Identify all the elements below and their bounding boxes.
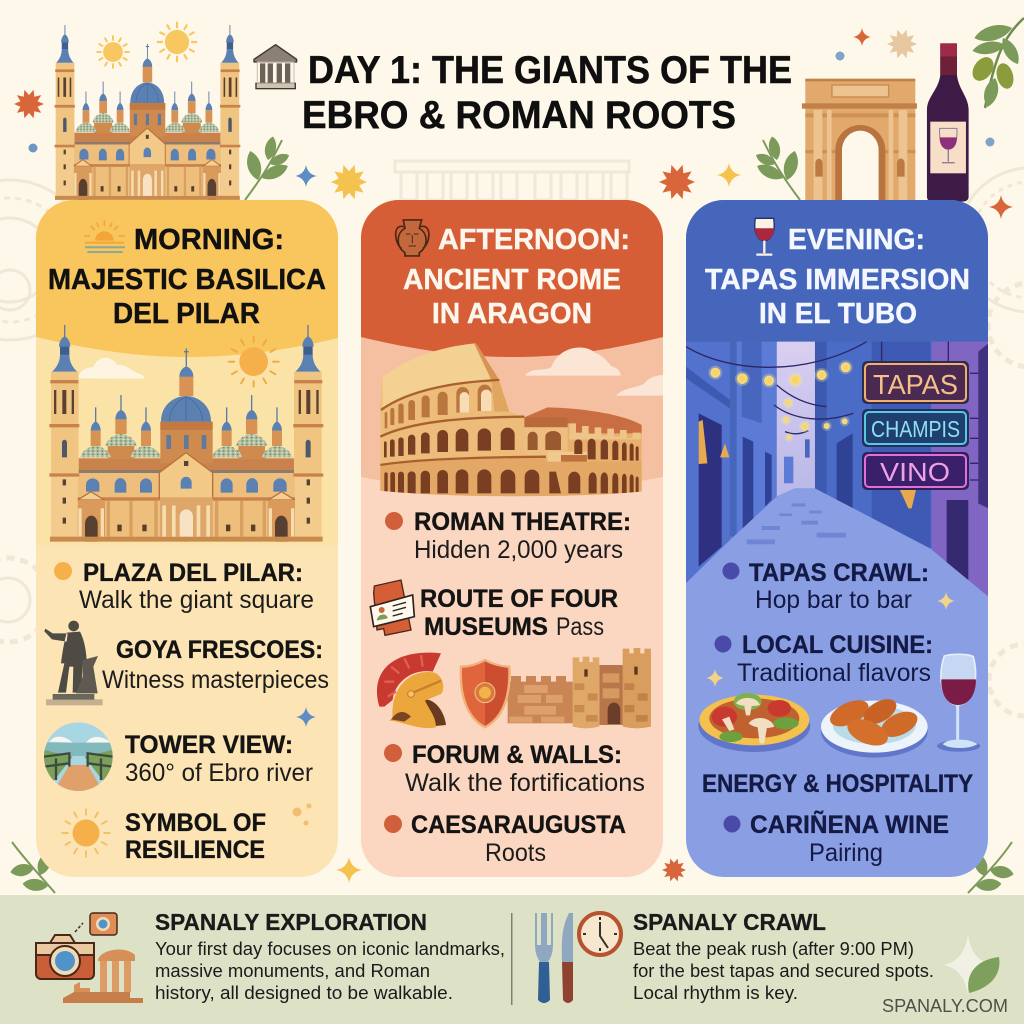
sparkle (706, 669, 724, 687)
item: route of four museums (420, 585, 618, 641)
item: local cuisine: Traditional flavors (737, 659, 931, 687)
item: plaza del pilar (54, 559, 314, 614)
item: caesaraugusta (384, 811, 626, 867)
heading: afternoon: AFTERNOON: (438, 224, 630, 256)
heading: afternoon: ANCIENT ROME (403, 264, 621, 296)
neon sign: champis: CHAMPIS (871, 416, 960, 442)
item: plaza del pilar: Walk the giant square (79, 586, 314, 614)
neon sign: vino (862, 452, 969, 490)
item: energy and hospitality: ENERGY & HOSPITALITY (702, 770, 973, 798)
scene: alley (686, 342, 988, 607)
text block: for the best tapas and secured spots. (633, 960, 934, 981)
icon: wine glass large (937, 654, 980, 752)
olive branch top right (968, 18, 1024, 109)
scene: colosseum (380, 343, 663, 497)
neon sign: tapas: TAPAS (873, 369, 958, 400)
heading: morning: MORNING: (134, 224, 284, 256)
illustration: basilica top (55, 25, 240, 200)
item: symbol of resilience (125, 809, 266, 864)
heading: evening: IN EL TUBO (759, 298, 917, 330)
heading: SPANALY CRAWL (633, 909, 826, 935)
item: tower view (125, 731, 313, 787)
footer band (0, 895, 1024, 1024)
item: local cuisine: LOCAL CUISINE: (742, 631, 933, 659)
item: caesaraugusta: CAESARAUGUSTA (411, 811, 626, 839)
item: symbol of resilience: SYMBOL OF (125, 809, 266, 837)
sprigs of olive leaves (9, 135, 1015, 893)
icon: amphora (396, 220, 429, 256)
item: tower view: TOWER VIEW: (125, 731, 293, 759)
text block (633, 938, 934, 1003)
item: goya frescoes (102, 636, 329, 694)
item: symbol of resilience: RESILIENCE (125, 836, 265, 864)
heading: morning: MAJESTIC BASILICA (48, 264, 326, 296)
divider (511, 913, 512, 1005)
item: goya frescoes: GOYA FRESCOES: (116, 636, 323, 664)
logo: spanaly: SPANALY.COM (882, 996, 1008, 1016)
dots (292, 804, 312, 826)
heading: morning (48, 224, 326, 330)
item: forum and walls: FORUM & WALLS: (412, 741, 622, 769)
icon: tower view (44, 722, 113, 793)
icon: sun (62, 809, 110, 857)
item: route of four museums: Pass (556, 613, 604, 641)
string lights (686, 342, 978, 480)
text block: Beat the peak rush (after 9:00 PM) (633, 938, 914, 959)
footer: crawl (535, 909, 934, 1003)
item: roman theatre: ROMAN THEATRE: (414, 508, 631, 536)
footer: exploration (36, 909, 505, 1003)
item: plaza del pilar: PLAZA DEL PILAR: (83, 559, 303, 587)
item: tapas crawl: TAPAS CRAWL: (749, 559, 929, 587)
heading: afternoon (403, 224, 630, 330)
neon sign: vino: VINO (880, 457, 950, 487)
panel: evening (686, 200, 988, 877)
item: tapas crawl (722, 559, 929, 614)
sparkle (937, 592, 955, 610)
heading: afternoon: IN ARAGON (432, 298, 592, 330)
item: tower view: 360° of Ebro river (125, 759, 313, 787)
faint medallion patterns (0, 168, 1024, 716)
text block: massive monuments, and Roman (155, 960, 430, 981)
title line 1: DAY 1: THE GIANTS OF THE (308, 49, 792, 92)
text block: history, all designed to be walkable. (155, 982, 453, 1003)
icon: goya statue (44, 621, 103, 705)
scene: basilica with sun (49, 325, 323, 542)
heading: SPANALY EXPLORATION (155, 909, 427, 935)
sparkle (296, 707, 316, 727)
item: route of four museums: MUSEUMS (424, 613, 548, 641)
neon sign: tapas (862, 361, 969, 404)
icon: fork and knife (535, 913, 573, 1003)
item: goya frescoes: Witness masterpieces (102, 666, 329, 694)
text block: Your first day focuses on iconic landmarks, (155, 938, 505, 959)
icon: ticket (370, 580, 414, 635)
neon sign: champis (862, 409, 969, 447)
icon: temple (254, 45, 297, 89)
title line 2: EBRO & ROMAN ROOTS (302, 94, 736, 137)
item: forum and walls: Walk the fortifications (405, 769, 645, 797)
title (254, 45, 792, 137)
heading: morning: DEL PILAR (113, 298, 260, 330)
item: caesaraugusta: Roots (485, 839, 546, 867)
item: roman theatre (385, 508, 631, 564)
item: carinena wine: CARIÑENA WINE (750, 809, 949, 839)
food: croquettes plate (821, 694, 928, 758)
icon: camera and ruins (36, 913, 143, 1003)
logo: spanaly (882, 935, 1008, 1016)
faint temple outline (395, 161, 629, 200)
item: local cuisine (714, 631, 933, 687)
heading: evening: TAPAS IMMERSION (705, 264, 970, 296)
panel: morning (36, 200, 338, 877)
item: carinena wine (724, 809, 949, 867)
icons: roman helmet, shield and walls (377, 648, 651, 728)
suns top (97, 23, 196, 68)
item: tapas crawl: Hop bar to bar (755, 586, 912, 614)
item: route of four museums: ROUTE OF FOUR (420, 585, 618, 613)
item: roman theatre: Hidden 2,000 years (414, 536, 623, 564)
text block (155, 938, 505, 1003)
text block: Local rhythm is key. (633, 982, 798, 1003)
heading: evening: EVENING: (788, 224, 925, 256)
panel: afternoon (361, 200, 663, 877)
triumphal arch (802, 79, 917, 200)
wine bottle (927, 43, 969, 202)
icon: clock (579, 913, 621, 955)
heading: evening (705, 224, 970, 330)
item: forum and walls (384, 741, 645, 797)
icon: sunrise (84, 220, 125, 252)
item: carinena wine: Pairing (809, 839, 883, 867)
food: mushroom tapas plate (698, 693, 810, 752)
icon: wine glass (755, 218, 774, 255)
